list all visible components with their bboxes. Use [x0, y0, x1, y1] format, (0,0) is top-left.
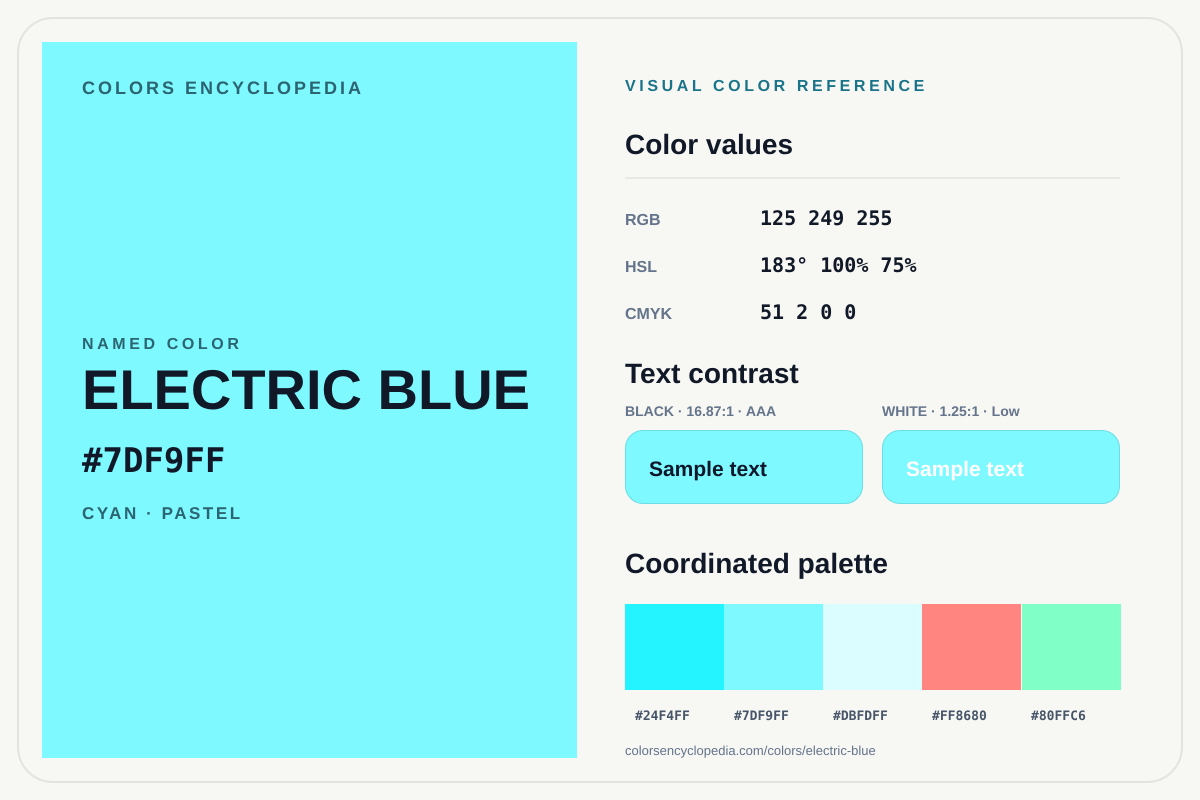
palette swatches: [625, 604, 1121, 690]
category tags: CYAN · PASTEL: [82, 504, 243, 523]
hex label 3: #DBFDFF: [833, 709, 888, 724]
black contrast label: BLACK · 16.87:1 · AAA: [625, 403, 776, 419]
heading: text contrast: Text contrast: [625, 358, 799, 389]
swatch 3: [823, 604, 922, 690]
hex code: #7DF9FF: [82, 441, 225, 481]
named color label: NAMED COLOR: [82, 336, 242, 353]
panel: color swatch: [42, 42, 577, 758]
hex label 4: #FF8680: [932, 709, 987, 724]
black sample text: Sample text: [649, 458, 767, 481]
panel: color values: [625, 129, 1120, 324]
eyebrow heading: VISUAL COLOR REFERENCE: [625, 78, 928, 95]
swatch 2: [724, 604, 823, 690]
HSL value: 183° 100% 75%: [760, 253, 917, 277]
brand label: COLORS ENCYCLOPEDIA: [82, 78, 364, 98]
source url: colorsencyclopedia.com/colors/electric-blue: [625, 743, 876, 758]
swatch 4: [922, 604, 1021, 690]
white contrast label: WHITE · 1.25:1 · Low: [882, 403, 1020, 419]
black sample chip: [625, 430, 863, 504]
RGB value: 125 249 255: [760, 206, 892, 230]
row: HSL: [625, 253, 917, 277]
row: CMYK: [625, 300, 856, 324]
swatch 5: [1022, 604, 1121, 690]
CMYK label: CMYK: [625, 306, 672, 323]
color name: ELECTRIC BLUE: [82, 358, 530, 421]
CMYK value: 51 2 0 0: [760, 300, 856, 324]
swatch 1: [625, 604, 724, 690]
white sample text: Sample text: [906, 458, 1024, 481]
HSL label: HSL: [625, 259, 657, 276]
divider: [625, 177, 1120, 179]
white sample chip: [882, 430, 1120, 504]
RGB label: RGB: [625, 212, 661, 229]
hex label 5: #80FFC6: [1031, 709, 1086, 724]
hex label 2: #7DF9FF: [734, 709, 789, 724]
row: RGB: [625, 206, 892, 230]
heading: coordinated palette: Coordinated palette: [625, 548, 888, 579]
hex label 1: #24F4FF: [635, 709, 690, 724]
heading: color values: Color values: [625, 129, 793, 160]
